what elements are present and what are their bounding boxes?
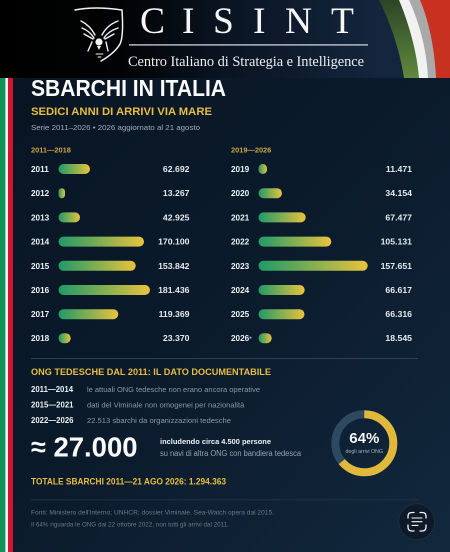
bar chart: 2011-2018: 2015 [31,262,50,271]
timeline rows: 22.513 sbarchi da organizzazioni tedesche [87,416,231,425]
bar chart: 2011-2018: 2014 [31,238,50,247]
bar chart: 2019-2026: 67.477 [385,212,412,222]
bar chart: 2019-2026: 157.651 [381,261,412,271]
sources: Fonti: Ministero dell'Interno; UNHCR; dossier Viminale. Sea-Watch opera dal 2015. [31,510,274,517]
italian flag side stripe [0,78,13,552]
icon: scan text button [399,504,435,540]
donut chart 64%: degli arrivi ONG [345,449,383,455]
logo rule [129,44,368,46]
bar chart: 2011-2018: 2016 [31,286,50,295]
bar chart: 2011-2018 [31,146,190,343]
ONG section heading: ONG TEDESCHE DAL 2011: IL DATO DOCUMENTABILE [31,367,272,378]
timeline rows: 2022—2026 [31,416,74,425]
big number note [160,437,302,458]
timeline rows: 2011—2014 [31,385,74,394]
bar chart: 2019-2026: 2020 [231,189,250,198]
timeline rows [31,385,260,425]
bar chart: 2011-2018: 119.369 [159,309,190,319]
flag ribbon [379,0,450,78]
bar chart: 2011-2018: 23.370 [163,333,190,343]
bar chart: 2019-2026: 18.545 [385,333,412,343]
bar chart: 2019-2026: 2024 [231,286,250,295]
bar chart: 2019-2026: 2025 [231,310,250,319]
bar chart: 2011-2018: 2011 [31,165,49,174]
bar chart: 2011-2018: 42.925 [163,212,190,222]
sources: Il 64% riguarda le ONG dal 22 ottobre 2022, non tutti gli arrivi dal 2011. [31,523,229,529]
bar chart: 2019-2026: 2022 [231,238,250,247]
total: TOTALE SBARCHI 2011—21 AGO 2026: 1.294.363 [31,476,226,486]
timeline rows: le attuali ONG tedesche non erano ancora operative [87,385,260,394]
bar chart: 2019-2026: 66.316 [385,309,412,319]
period label: 2011—2018 [31,146,71,154]
series note: Serie 2011–2026 • 2026 aggiornato al 21 agosto [31,123,200,132]
period label: 2019—2026 [231,146,271,154]
bar chart: 2011-2018: 2012 [31,189,50,198]
bar chart: 2019-2026: 66.617 [385,285,412,295]
bar chart: 2011-2018: 153.842 [158,261,190,271]
bar chart: 2011-2018: 2017 [31,310,50,319]
big number note: includendo circa 4.500 persone [160,437,271,446]
bar chart: 2011-2018: 62.692 [163,164,190,174]
header banner [0,0,450,78]
big number: 27.000 [54,432,138,462]
logo subtitle: Centro Italiano di Strategia e Intelligence [128,54,364,70]
bar chart: 2019-2026: 2026* [231,334,252,343]
timeline rows: 2015—2021 [31,400,74,410]
bar chart: 2019-2026: 2019 [231,165,250,174]
sources [31,510,274,529]
logo shield [75,8,123,61]
timeline rows: dati del Viminale non omogenei per nazionalità [87,400,245,410]
bar chart: 2019-2026: 11.471 [386,164,412,174]
bar chart: 2011-2018: 181.436 [158,285,190,295]
donut chart 64%: 64% [349,430,379,447]
bar chart: 2011-2018: 2013 [31,213,50,222]
logo wordmark: CISINT [140,1,354,42]
bar chart: 2011-2018: 170.100 [158,237,190,247]
bar chart: 2019-2026: 2023 [231,262,250,271]
big number note: su navi di altra ONG con bandiera tedesca [160,449,302,458]
title: SBARCHI IN ITALIA [31,75,226,101]
bar chart: 2019-2026: 2021 [231,213,250,222]
bar chart: 2011-2018: 13.267 [163,188,190,198]
bar chart: 2019-2026 [231,146,412,343]
big number: ≈ [31,432,46,462]
bar chart: 2011-2018: 2018 [31,334,50,343]
bar chart: 2019-2026: 34.154 [385,188,412,198]
donut chart 64% [335,414,393,472]
subtitle: SEDICI ANNI DI ARRIVI VIA MARE [31,106,212,118]
bar chart: 2019-2026: 105.131 [381,237,412,247]
